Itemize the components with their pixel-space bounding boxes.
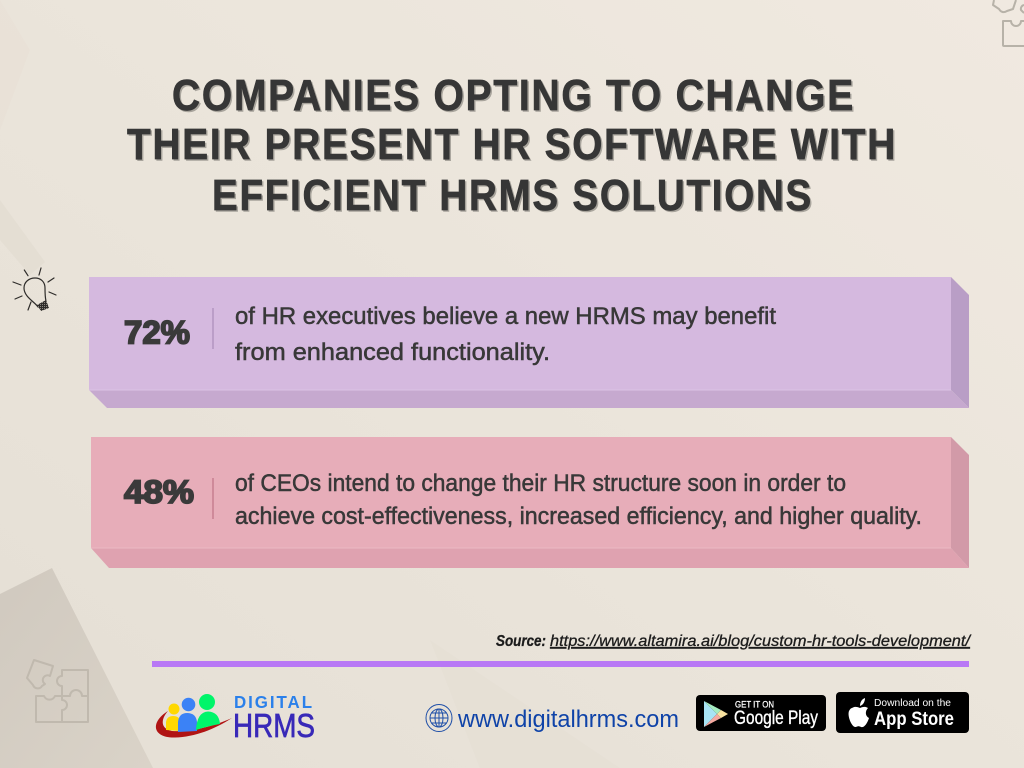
logo: Digital HRMS: HRMS: [233, 707, 315, 744]
title: EFFICIENT HRMS SOLUTIONS: [214, 172, 814, 222]
text: 48% description: achieve cost-effectiveness, increased efficiency, and higher quality.: [235, 503, 922, 530]
source citation: https://www.altamira.ai/blog/custom-hr-tools-development/: [550, 633, 972, 650]
source citation: Source:: [496, 633, 546, 650]
text: 48% description: of CEOs intend to change their HR structure soon in order to: [235, 470, 846, 497]
badge: Google Play: GET IT ON: [735, 700, 774, 710]
text: 72% description: [235, 303, 776, 366]
divider bar: [152, 661, 969, 667]
text: 72% description: from enhanced functionality.: [235, 339, 550, 366]
text: 48% description: [235, 470, 922, 530]
title: THEIR PRESENT HR SOFTWARE WITH: [127, 120, 897, 169]
website url: www.digitalhrms.com: [457, 706, 679, 733]
icon: globe: [426, 704, 452, 732]
icon: puzzle top right: [993, 0, 1024, 46]
stat: 48%: 48%: [124, 474, 194, 510]
panel: 48% stat: [91, 437, 969, 568]
panel: 72% stat: [89, 277, 969, 408]
title: [127, 71, 898, 222]
stat: 72%: 72%: [124, 314, 190, 350]
badge: Google Play: Google Play: [734, 708, 818, 729]
title: THEIR PRESENT HR SOFTWARE WITH: [128, 122, 898, 170]
badge: Google Play: [696, 695, 826, 731]
title: EFFICIENT HRMS SOLUTIONS: [212, 171, 813, 220]
icon: light bulb: [13, 268, 56, 311]
logo: Digital HRMS: DIGITAL: [234, 692, 314, 712]
badge: App Store: Download on the: [874, 698, 951, 709]
title: COMPANIES OPTING TO CHANGE: [174, 72, 856, 122]
badge: App Store: [836, 692, 969, 733]
icon: puzzle bottom left: [27, 660, 88, 722]
logo: Digital HRMS: [156, 692, 315, 744]
text: 72% description: of HR executives believe a new HRMS may benefit: [235, 303, 776, 330]
badge: App Store: App Store: [874, 709, 954, 730]
title: COMPANIES OPTING TO CHANGE: [172, 71, 855, 120]
